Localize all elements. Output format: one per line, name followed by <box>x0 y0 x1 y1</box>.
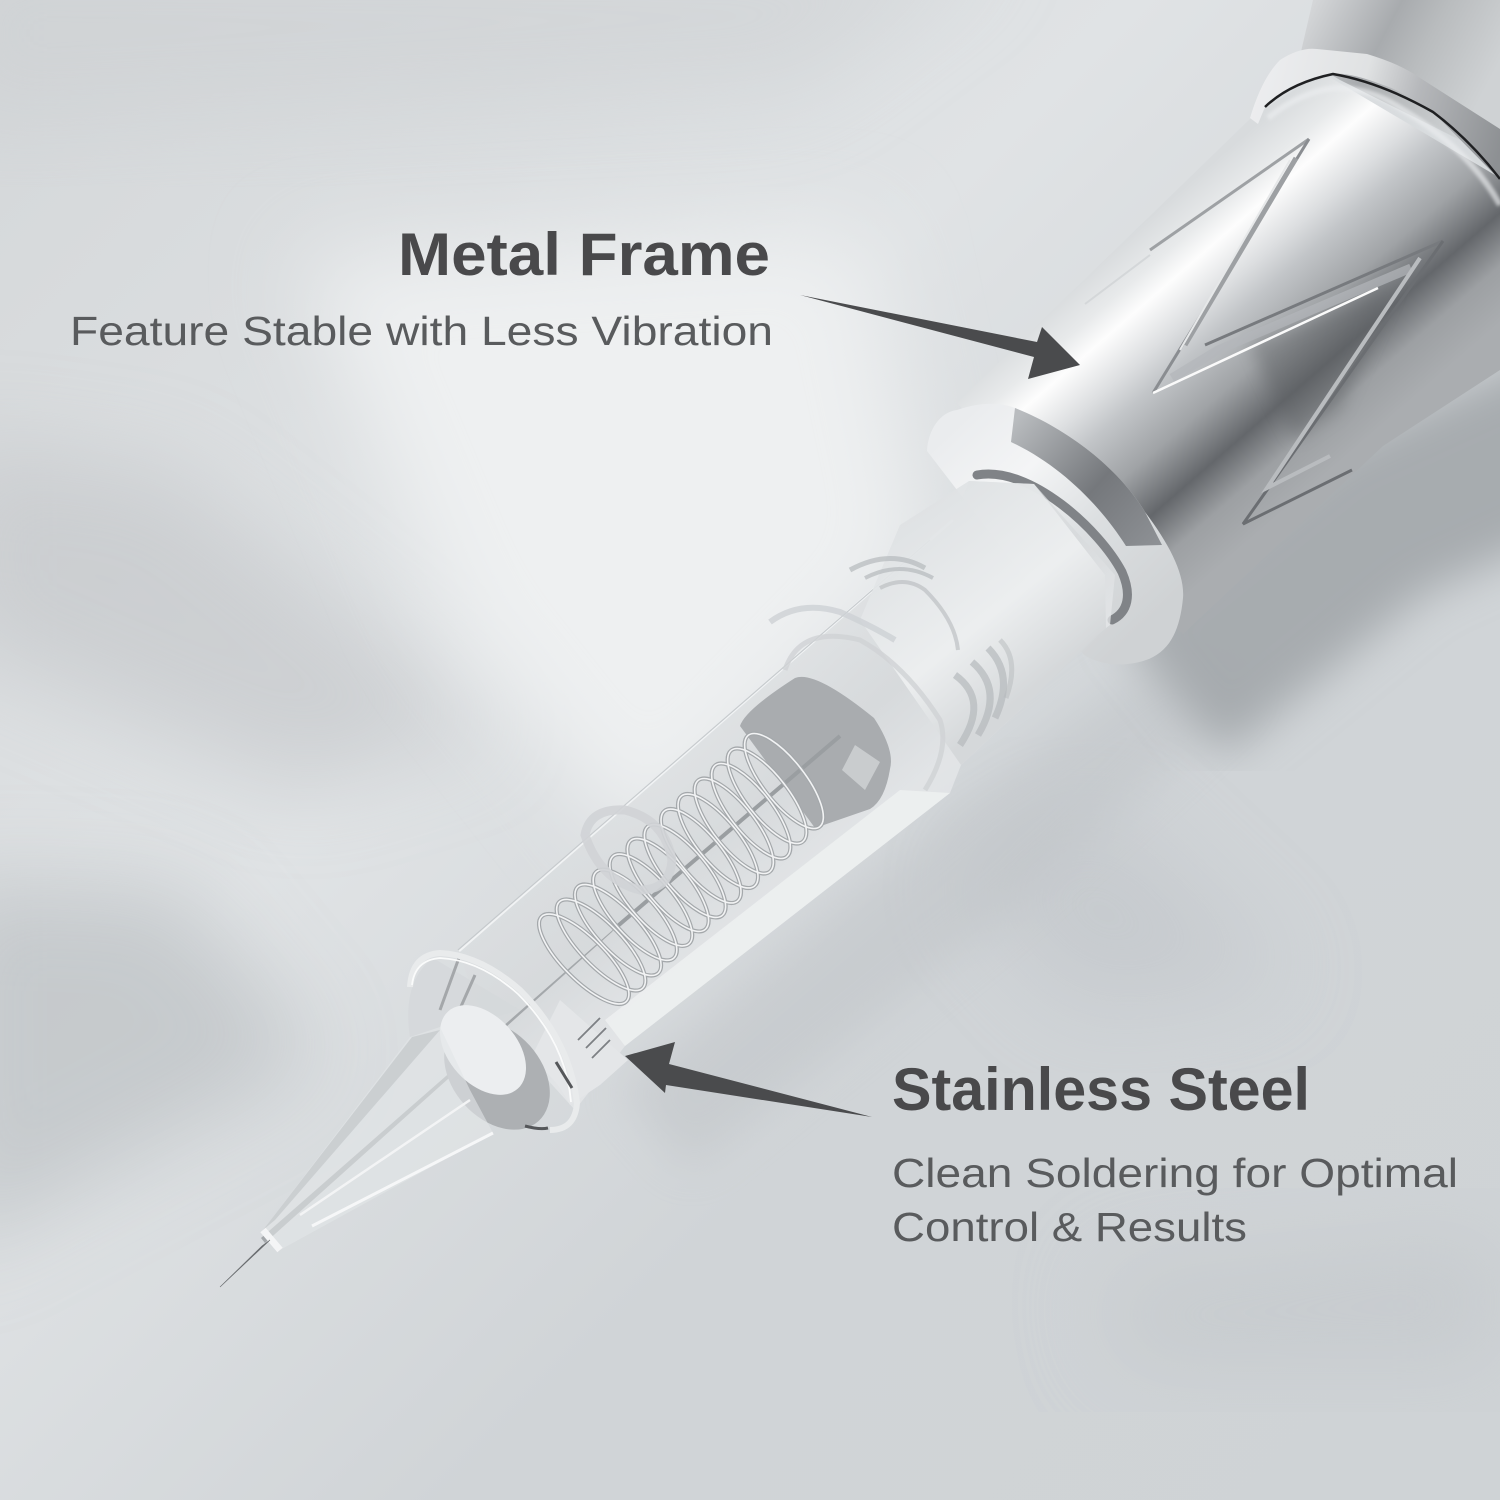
lower flange <box>927 404 1183 664</box>
flange band <box>1011 408 1162 546</box>
needle point <box>220 1240 270 1287</box>
heading: Metal Frame <box>398 221 770 288</box>
logo engraving <box>1085 139 1443 524</box>
description: Feature Stable with Less Vibration <box>70 308 773 354</box>
arrow: stainless steel <box>625 1042 872 1117</box>
clear swirl loop <box>585 810 672 890</box>
callout: metal frame <box>70 221 773 354</box>
cone flare <box>408 958 520 1037</box>
inner hub block <box>740 677 891 828</box>
lower highlight band <box>605 790 950 1046</box>
grey inner cylinder <box>423 999 571 1151</box>
needle shaft <box>613 736 840 930</box>
description: Clean Soldering for Optimal <box>892 1150 1458 1196</box>
arrow: metal frame <box>800 295 1080 379</box>
needle cartridge <box>220 481 1115 1287</box>
heading: Stainless Steel <box>892 1056 1310 1123</box>
cast shadow of the pen <box>1170 420 1500 690</box>
inner flange collar <box>977 474 1127 620</box>
callout: stainless steel <box>892 1056 1458 1250</box>
flange ring <box>410 953 577 1130</box>
tip hub <box>408 953 628 1151</box>
white inner blob <box>423 989 543 1111</box>
chrome sleeve <box>530 1000 628 1105</box>
grip body <box>957 72 1500 634</box>
threaded section <box>860 481 1106 765</box>
dark shading inside logo <box>1250 285 1395 440</box>
pen handle: metal frame <box>927 0 1500 664</box>
upper tube <box>1300 0 1500 160</box>
collar groove <box>1265 74 1500 179</box>
clear barrel <box>459 481 1115 1110</box>
tip cone <box>263 1027 493 1250</box>
upper collar ring <box>1250 49 1500 180</box>
callout: stainless steel: Control & Results <box>892 1204 1247 1250</box>
spring coils <box>527 722 836 1016</box>
